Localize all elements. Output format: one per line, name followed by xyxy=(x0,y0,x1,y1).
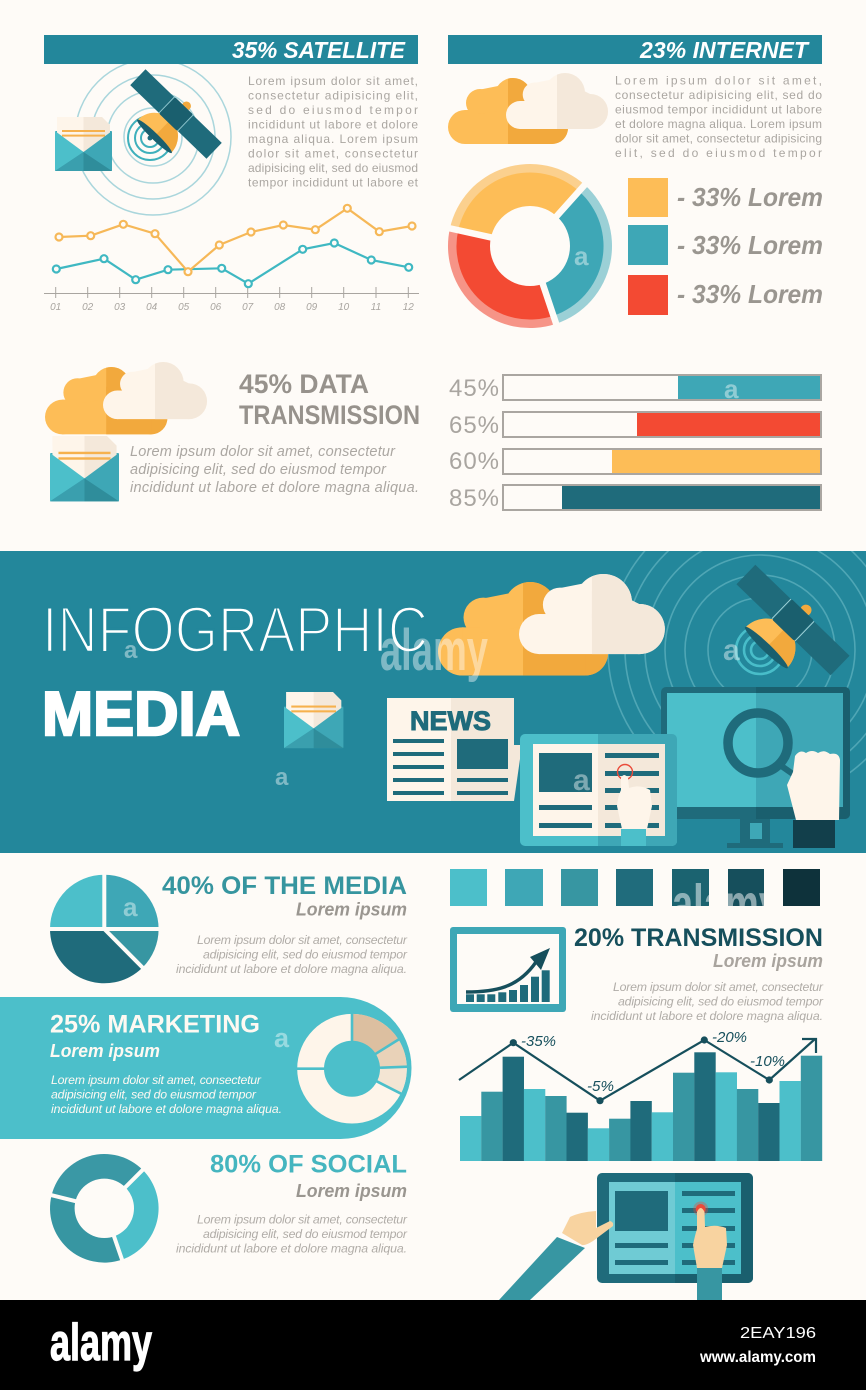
panel: 40% of the media xyxy=(48,872,408,983)
heading bar: internet xyxy=(448,35,822,64)
text block: internet: consectetur adipisicing elit, sed do xyxy=(615,88,822,102)
watermark: alamy letters on banner: a xyxy=(723,634,740,667)
heading: 25% marketing: 25% MARKETING xyxy=(50,1010,260,1038)
text block: data transmission: incididunt ut labore et dolore magna aliqua. xyxy=(130,480,419,496)
icon: satellite xyxy=(114,65,226,176)
line chart: satellite months: 10 xyxy=(338,302,350,313)
line chart: satellite months: 05 xyxy=(178,302,190,313)
text block: internet: elit, sed do eiusmod tempor xyxy=(615,146,822,160)
text block: marketing: incididunt ut labore et dolore magna aliqua. xyxy=(51,1102,282,1116)
text block: satellite: magna aliqua. Lorem ipsum xyxy=(248,132,418,146)
heading: data transmission: 45% DATA xyxy=(239,369,369,399)
panel: 35% satellite xyxy=(44,35,419,313)
line chart: satellite months: 04 xyxy=(146,302,158,313)
bar chart: transmission xyxy=(460,1052,822,1161)
legend: donut chart: - 33% Lorem xyxy=(677,230,823,260)
heading: 80% of social: 80% OF SOCIAL xyxy=(210,1150,407,1178)
watermark: alamy letters on banner: a xyxy=(124,637,138,664)
watermark: alamy letter on upper panels: a xyxy=(724,374,739,404)
watermark: alamy letter: a xyxy=(274,1023,290,1053)
legend: donut chart: - 33% Lorem xyxy=(677,182,823,212)
palette: colour swatches xyxy=(450,869,820,906)
pie chart: media xyxy=(48,872,161,983)
icon: banner tablet with hand xyxy=(520,734,677,846)
text block: media: Lorem ipsum dolor sit amet, consectetur xyxy=(197,933,408,947)
heading bar: satellite xyxy=(44,35,418,64)
panel: 80% of social xyxy=(48,1150,408,1263)
text block: internet: et dolore magna aliqua. Lorem ipsum xyxy=(615,117,822,131)
bar chart: progress bars: 65% xyxy=(449,412,499,439)
panel: 45% data transmission xyxy=(45,362,420,501)
text block: media xyxy=(176,933,408,976)
line chart: satellite months: 01 xyxy=(50,302,61,313)
line chart: satellite months: 02 xyxy=(82,302,94,313)
title: infographic: INFOGRAPHIC xyxy=(42,593,428,666)
trend line with labels: -5% xyxy=(587,1078,614,1095)
palette: colour swatches: alamy xyxy=(672,874,780,934)
text block: satellite: consectetur adipisicing elit, xyxy=(248,88,418,102)
line chart: satellite months xyxy=(44,205,419,313)
text block: transmission: incididunt ut labore et dolore magna aliqua. xyxy=(591,1009,823,1023)
text block: satellite xyxy=(248,74,419,190)
text block: social: Lorem ipsum dolor sit amet, consectetur xyxy=(197,1212,408,1226)
icon: banner signal rings xyxy=(608,551,866,774)
text block: satellite: incididunt ut labore et dolore xyxy=(248,118,418,132)
footer: alamy credit bar: alamy xyxy=(50,1314,152,1372)
icon: newspaper: NEWS xyxy=(410,706,491,736)
watermark: alamy letter on upper panels: a xyxy=(574,241,589,271)
donut chart: three segments xyxy=(446,164,612,328)
text block: internet xyxy=(615,74,822,160)
icon: banner clouds xyxy=(438,574,665,676)
line chart: satellite months: 09 xyxy=(306,302,318,313)
title: media: MEDIA xyxy=(42,680,240,749)
text block: transmission: Lorem ipsum dolor sit amet, consectetur xyxy=(613,980,824,994)
text block: satellite: sed do eiusmod tempor xyxy=(248,103,418,117)
trend line with labels xyxy=(459,1029,816,1104)
trend line with labels: -35% xyxy=(521,1033,556,1050)
footer: alamy credit bar: 2EAY196 xyxy=(740,1325,816,1342)
text block: transmission xyxy=(591,980,824,1023)
watermark: alamy letter on upper panels xyxy=(123,241,739,922)
text block: transmission: adipisicing elit, sed do eiusmod tempor xyxy=(618,994,824,1008)
watermark: alamy letters on banner: a xyxy=(573,764,590,797)
subheading: media: Lorem ipsum xyxy=(296,898,407,920)
watermark: alamy letters on banner xyxy=(124,634,740,797)
text block: data transmission: adipisicing elit, sed do eiusmod tempor xyxy=(130,462,387,478)
text block: data transmission: Lorem ipsum dolor sit amet, consectetur xyxy=(130,444,396,460)
bar chart: progress bars: 45% xyxy=(449,375,499,402)
icon: tablet with hands xyxy=(499,1173,753,1300)
panel: 25% marketing xyxy=(0,997,412,1139)
icon: clouds xyxy=(448,73,608,144)
panel: 23% internet xyxy=(446,35,823,328)
text block: social: incididunt ut labore et dolore magna aliqua. xyxy=(176,1242,407,1256)
footer: alamy credit bar: www.alamy.com xyxy=(699,1349,816,1366)
banner: infographic media xyxy=(0,551,866,853)
heading: data transmission xyxy=(239,369,420,430)
text block: satellite: tempor incididunt ut labore et xyxy=(248,176,419,190)
text block: media: adipisicing elit, sed do eiusmod tempor xyxy=(203,948,408,962)
bar chart: progress bars: 85% xyxy=(449,485,499,512)
line chart: satellite months: 12 xyxy=(403,302,414,313)
donut chart: social xyxy=(48,1154,159,1263)
text block: internet: Lorem ipsum dolor sit amet, xyxy=(615,74,822,88)
icon: growth chart screen xyxy=(450,927,566,1012)
text block: marketing xyxy=(51,1073,282,1116)
text block: satellite: Lorem ipsum dolor sit amet, xyxy=(248,74,418,88)
heading: data transmission: TRANSMISSION xyxy=(239,400,420,430)
heading bar: satellite: 35% SATELLITE xyxy=(232,37,406,63)
heading: 20% transmission: 20% TRANSMISSION xyxy=(574,924,823,952)
heading: 40% of the media: 40% OF THE MEDIA xyxy=(162,872,407,900)
footer: alamy credit bar xyxy=(0,1300,866,1390)
watermark: alamy: alamy xyxy=(380,618,488,683)
line chart: satellite months: 03 xyxy=(114,302,126,313)
trend line with labels: -20% xyxy=(712,1029,747,1046)
icon: newspaper xyxy=(387,698,522,801)
icon: banner envelope xyxy=(284,692,343,748)
line chart: satellite months: 08 xyxy=(274,302,286,313)
bar chart: progress bars xyxy=(449,375,821,512)
legend: donut chart: - 33% Lorem xyxy=(677,279,823,309)
text block: social: adipisicing elit, sed do eiusmod tempor xyxy=(203,1227,408,1241)
text block: satellite: adipisicing elit, sed do eiusmod xyxy=(248,161,418,175)
panel: 20% transmission xyxy=(450,924,824,1161)
heading bar: internet: 23% INTERNET xyxy=(639,37,810,63)
legend: donut chart xyxy=(628,178,823,315)
trend line with labels: -10% xyxy=(750,1053,785,1070)
text block: media: incididunt ut labore et dolore magna aliqua. xyxy=(176,962,407,976)
text block: marketing: Lorem ipsum dolor sit amet, consectetur xyxy=(51,1073,262,1087)
text block: satellite: dolor sit amet, consectetur xyxy=(248,146,418,160)
watermark: alamy letters on banner: a xyxy=(275,764,289,791)
line chart: satellite months: 06 xyxy=(210,302,222,313)
icon: monitor with magnifier xyxy=(661,687,850,848)
subheading: marketing: Lorem ipsum xyxy=(50,1040,160,1061)
text block: internet: eiusmod tempor incididunt ut labore xyxy=(615,102,822,116)
icon: envelope xyxy=(55,117,112,171)
subheading: transmission: Lorem ipsum xyxy=(713,950,823,971)
icon: banner satellite xyxy=(716,559,855,696)
icon: clouds and envelope xyxy=(45,362,207,501)
text block: social xyxy=(176,1212,408,1256)
icon: satellite signal rings xyxy=(75,59,231,215)
line chart: satellite months: 07 xyxy=(242,302,254,313)
line chart: satellite months: 11 xyxy=(371,302,381,313)
bar chart: progress bars: 60% xyxy=(449,448,499,475)
text block: data transmission xyxy=(130,444,419,496)
text block: internet: dolor sit amet, consectetur adipisicing xyxy=(615,132,822,146)
watermark: alamy letter on upper panels: a xyxy=(123,892,138,922)
subheading: social: Lorem ipsum xyxy=(296,1180,407,1201)
text block: marketing: adipisicing elit, sed do eiusmod tempor xyxy=(51,1088,257,1102)
donut chart: marketing xyxy=(296,1012,408,1124)
